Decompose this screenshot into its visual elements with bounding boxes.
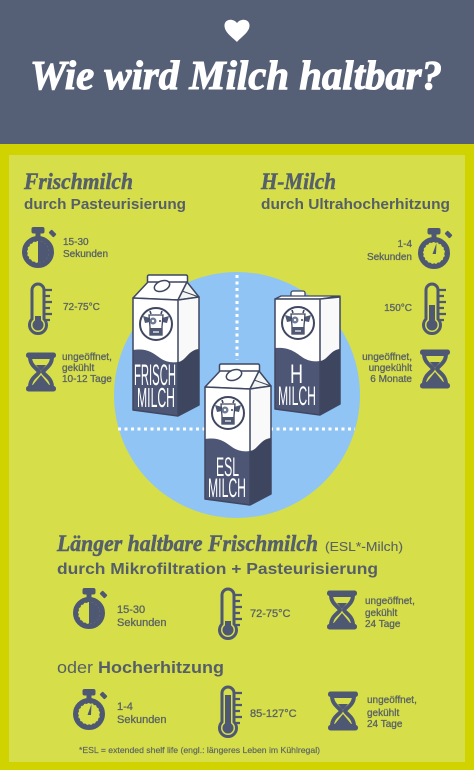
text: storage 24 Tage: gekühlt xyxy=(367,708,399,719)
text: storage Frischmilch: 10-12 Tage xyxy=(62,374,112,385)
text: storage H-Milch: 6 Monate xyxy=(370,374,412,385)
carton: ESL-Milch: MILCH xyxy=(208,473,246,503)
section: H-Milch xyxy=(260,169,453,388)
carton: H-Milch: MILCH xyxy=(278,381,316,411)
section: Frischmilch xyxy=(23,169,186,392)
text: storage 24 Tage: gekühlt xyxy=(365,608,397,619)
text: storage 24 Tage: 24 Tage xyxy=(365,619,401,630)
text: 15-30 Sekunden: 15-30 xyxy=(63,237,89,248)
text: storage Frischmilch: gekühlt xyxy=(62,363,94,374)
footnote: *ESL = extended shelf life (engl.: längeres Leben im Kühlregal) xyxy=(79,745,320,755)
icon: stopwatch needle xyxy=(420,228,453,266)
heading: H-Milch: H-Milch xyxy=(260,169,336,194)
text: 150°C: 150°C xyxy=(384,303,412,314)
carton: H-Milch xyxy=(275,291,340,415)
icon: hourglass xyxy=(26,352,56,392)
icon: heart xyxy=(224,20,250,42)
icon: stopwatch half xyxy=(24,227,57,266)
header band xyxy=(0,0,474,144)
carton: Frischmilch: MILCH xyxy=(137,382,175,413)
icon: stopwatch half xyxy=(76,588,108,626)
icon: stopwatch needle xyxy=(76,689,108,728)
heading: Frischmilch: Frischmilch xyxy=(23,169,133,194)
carton: Frischmilch xyxy=(133,275,199,416)
text: storage H-Milch: ungekühlt xyxy=(369,363,412,374)
carton: ESL-Milch xyxy=(205,364,271,505)
text: 15-30 Sekunden: 15-30 xyxy=(117,604,145,616)
icon: hourglass xyxy=(327,590,357,630)
text: 1-4 Sekunden: 1-4 xyxy=(117,701,133,713)
text: 1-4 Sekunden: Sekunden xyxy=(117,714,167,726)
text: (ESL*-Milch): (ESL*-Milch) xyxy=(325,539,403,554)
icon: hourglass xyxy=(328,692,358,730)
section: ESL-Milch xyxy=(56,531,417,755)
text: 1-4 Sekunden: Sekunden xyxy=(367,252,412,263)
text: storage 24 Tage: 24 Tage xyxy=(367,719,403,730)
icon: thermometer high xyxy=(220,687,242,737)
text: 15-30 Sekunden: Sekunden xyxy=(117,617,167,629)
label: ESL MILCH: ESL xyxy=(216,452,239,482)
blue circle with dotted dividers xyxy=(114,272,360,518)
subheading: durch Pasteurisierung: durch Pasteurisierung xyxy=(24,196,186,213)
subheading: oder Hocherhitzung: oder Hocherhitzung xyxy=(57,658,224,677)
text: 85-127°C: 85-127°C xyxy=(250,708,297,720)
text: 1-4 Sekunden: 1-4 xyxy=(398,239,412,250)
label: H MILCH: H xyxy=(290,359,303,389)
icon: thermometer high xyxy=(424,284,446,334)
text: 72-75°C: 72-75°C xyxy=(250,608,291,620)
text: storage H-Milch: ungeöffnet, xyxy=(362,352,412,363)
text: 15-30 Sekunden: Sekunden xyxy=(63,249,108,260)
text: storage 24 Tage: ungeöffnet, xyxy=(365,596,415,607)
icon: thermometer low xyxy=(30,284,52,334)
text: storage 24 Tage: ungeöffnet, xyxy=(367,695,417,706)
icon: thermometer low xyxy=(220,589,242,639)
subheading: durch Ultrahocherhitzung: durch Ultrahocherhitzung xyxy=(261,196,450,213)
carton: Frischmilch: FRISCH xyxy=(134,359,176,392)
title: Wie wird Milch haltbar? xyxy=(30,52,442,98)
icon: hourglass xyxy=(420,350,450,388)
main panel xyxy=(9,155,465,762)
text: 72-75°C: 72-75°C xyxy=(63,302,100,313)
subheading: Mikrofiltration + Pasteurisierung: durch Mikrofiltration + Pasteurisierung xyxy=(57,561,378,578)
text: storage Frischmilch: ungeöffnet, xyxy=(62,352,112,363)
heading: Länger haltbare Frischmilch: Länger haltbare Frischmilch xyxy=(56,531,318,556)
